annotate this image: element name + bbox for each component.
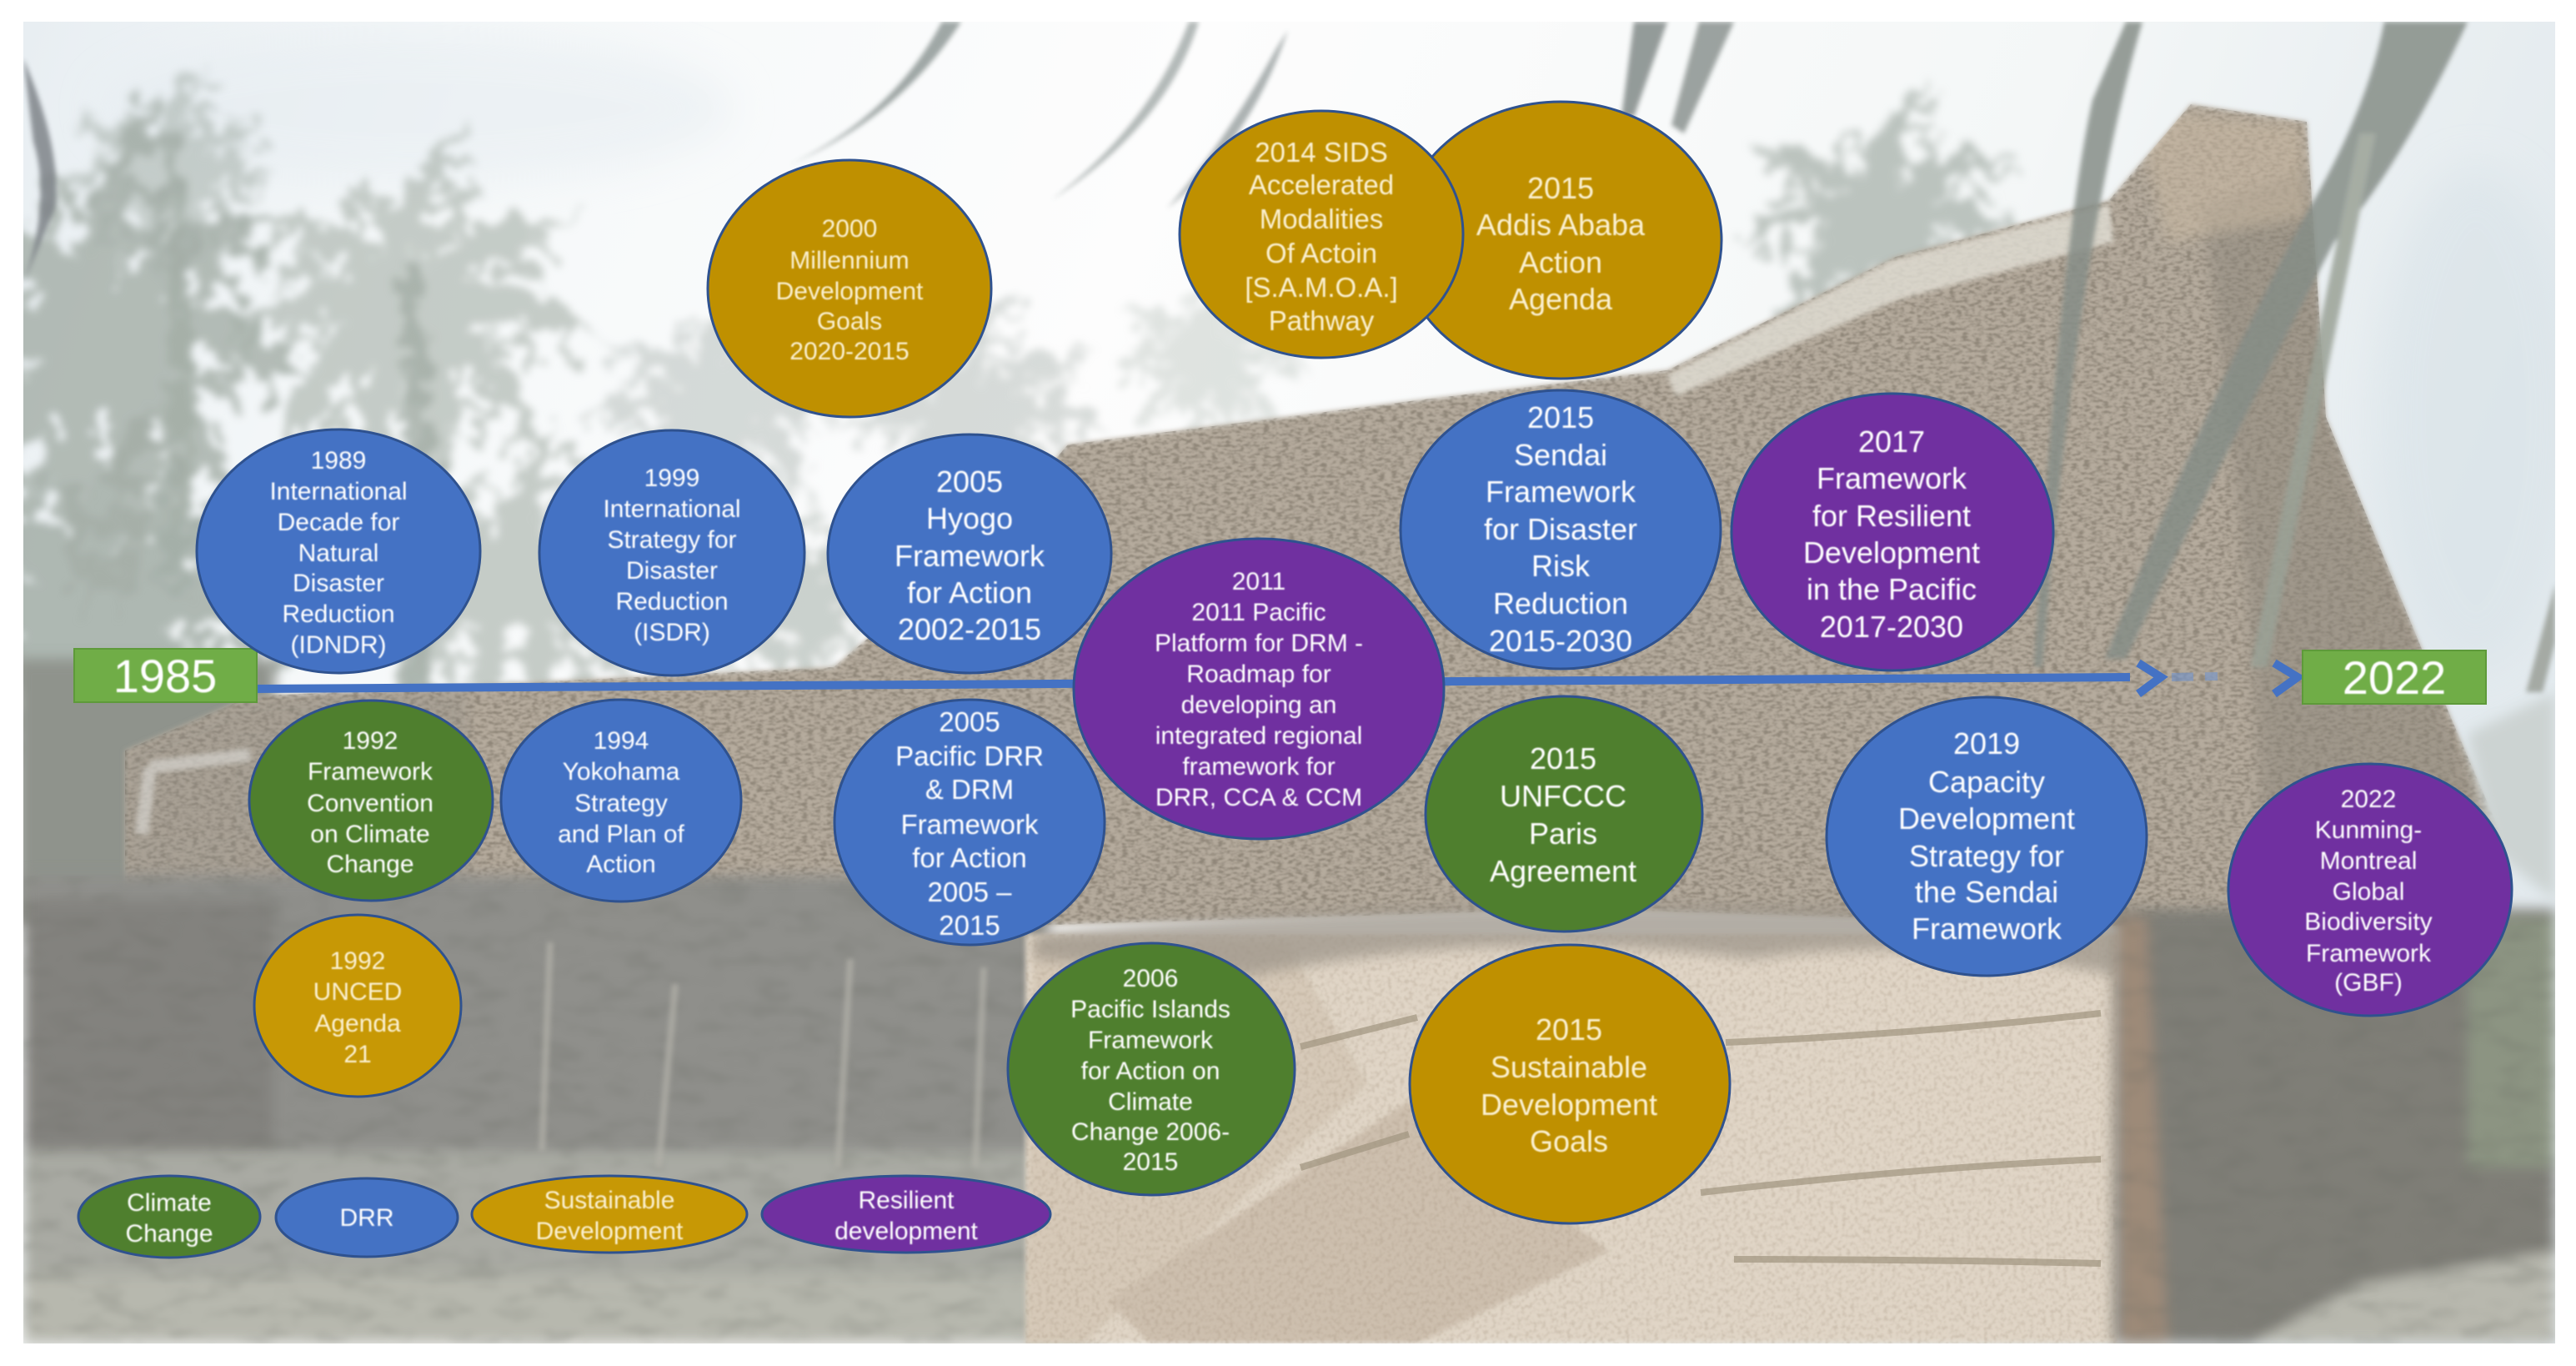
legend: sustainable development: Sustainable: [544, 1187, 674, 1214]
milestone: 2005 Hyogo Framework: 2005: [936, 465, 1003, 499]
milestone: 2015 Sendai Framework: Reduction: [1493, 586, 1628, 620]
milestone: 2005 Hyogo Framework: for Action: [907, 575, 1032, 610]
milestone: 2014 SIDS SAMOA Pathway: Accelerated: [1249, 169, 1394, 200]
legend: climate change: [78, 1176, 260, 1258]
dark right post and foliage: [2113, 692, 2555, 1343]
milestone: 2000 Millennium Development Goals: Goals: [817, 308, 882, 335]
milestone: 2005 Pacific DRR and DRM Framework: 2015: [939, 910, 1000, 941]
milestone: 2017 Framework for Resilient Development: Development: [1803, 535, 1980, 570]
milestone: 2005 Pacific DRR and DRM Framework: for Action: [912, 842, 1027, 873]
milestone: 2005 Pacific DRR and DRM Framework: 2005: [939, 706, 1000, 737]
milestone: 2022 Kunming-Montreal Global Biodiversity Framework: 2022: [2341, 786, 2396, 813]
milestone: 1999 ISDR: Strategy for: [607, 526, 737, 554]
milestone: 1992 UNCED Agenda 21: Agenda: [314, 1010, 401, 1037]
milestone: 2015 Addis Ababa Action Agenda: Agenda: [1509, 282, 1613, 316]
milestone: 2015 Sendai Framework: Risk: [1531, 549, 1591, 583]
legend: [78, 1176, 1050, 1258]
start year box: 1985: [113, 650, 217, 702]
legend: sustainable development: Development: [536, 1218, 684, 1245]
milestone: 2019 Capacity Development Strategy: [1827, 697, 2147, 976]
milestone: 2022 Kunming-Montreal Global Biodiversity Framework: Kunming-: [2315, 816, 2422, 844]
milestone: 2011 Pacific Platform for DRM: developing an: [1181, 691, 1336, 719]
legend: resilient development: development: [834, 1218, 979, 1245]
milestone: 2011 Pacific Platform for DRM: DRR, CCA & CCM: [1155, 784, 1362, 811]
milestone: 1989 IDNDR: Reduction: [282, 600, 395, 628]
milestone: 2019 Capacity Development Strategy: Strategy for: [1909, 839, 2064, 873]
milestone: 1989 IDNDR: [197, 429, 480, 673]
milestone: 2019 Capacity Development Strategy: 2019: [1953, 726, 2020, 761]
milestone: 2000 Millennium Development Goals: [708, 160, 991, 417]
milestone: 2014 SIDS SAMOA Pathway: [1180, 111, 1463, 358]
milestone: 1994 Yokohama Strategy: and Plan of: [558, 821, 685, 848]
milestone: 2011 Pacific Platform for DRM: 2011 Pacific: [1191, 599, 1326, 626]
milestone: 2006 Pacific Islands Framework for Action on Climate Change: 2006: [1123, 965, 1178, 992]
milestone: 2011 Pacific Platform for DRM: 2011: [1232, 568, 1285, 595]
milestone: 1999 ISDR: (ISDR): [634, 619, 710, 646]
milestone: 2019 Capacity Development Strategy: the Sendai: [1915, 875, 2058, 909]
hut shadow and dark underside: [23, 876, 1107, 1343]
milestone: 1992 UNCED Agenda 21: 21: [343, 1041, 372, 1068]
milestone: 1992 Framework Convention on Climate Change: 1992: [343, 727, 398, 755]
milestone: 2005 Hyogo Framework: 2002-2015: [898, 612, 1041, 646]
milestone: 1999 ISDR: 1999: [644, 465, 699, 492]
milestone: 2015 UNFCCC Paris Agreement: Agreement: [1490, 854, 1636, 888]
milestone: 2006 Pacific Islands Framework for Action on Climate Change: Climate: [1108, 1088, 1193, 1116]
legend: resilient development: [762, 1176, 1050, 1253]
milestone: 2006 Pacific Islands Framework for Action on Climate Change: Pacific Islands: [1070, 996, 1230, 1023]
milestone: 2014 SIDS SAMOA Pathway: [S.A.M.O.A.]: [1245, 272, 1398, 303]
milestone: 1992 Framework Convention on Climate Change: Convention: [307, 790, 434, 817]
milestone: 2005 Pacific DRR and DRM Framework: 2005 –: [928, 876, 1012, 907]
milestone: 1994 Yokohama Strategy: Yokohama: [563, 758, 680, 786]
milestone: 1992 UNCED Agenda 21: 1992: [330, 947, 385, 975]
milestone: 1989 IDNDR: International: [269, 478, 408, 505]
milestone: 2019 Capacity Development Strategy: Framework: [1912, 912, 2062, 946]
milestone: 1989 IDNDR: (IDNDR): [291, 631, 386, 659]
milestone: 2017 Framework for Resilient Development: for Resilient: [1812, 499, 1971, 533]
legend: climate change: Change: [125, 1220, 213, 1248]
milestone: 1999 ISDR: [539, 430, 804, 675]
legend: DRR: [276, 1178, 458, 1257]
milestone: 2015 Sendai Framework: for Disaster: [1484, 512, 1637, 546]
milestone: 2022 Kunming-Montreal Global Biodiversity Framework: Montreal: [2320, 847, 2417, 875]
milestone: 2015 UNFCCC Paris Agreement: Paris: [1529, 816, 1597, 851]
milestone: 2014 SIDS SAMOA Pathway: 2014 SIDS: [1255, 137, 1388, 168]
milestone: 2015 Sustainable Development Goals: Goals: [1530, 1124, 1608, 1158]
milestone: 2005 Hyogo Framework: Hyogo: [926, 501, 1013, 535]
milestone: 2015 Sendai Framework: Sendai: [1514, 438, 1607, 472]
milestone: 2015 Addis Ababa Action Agenda: [1400, 102, 1722, 379]
long palm fronds: [23, 22, 2555, 692]
milestone: 2005 Pacific DRR and DRM Framework: & DRM: [925, 774, 1014, 805]
milestone: 2022 Kunming-Montreal Global Biodiversity Framework: Global: [2333, 878, 2404, 906]
milestone: 2000 Millennium Development Goals: 2000: [822, 215, 877, 243]
milestone: 2006 Pacific Islands Framework for Action on Climate Change: Change 2006-: [1071, 1118, 1230, 1146]
milestone: 2015 Sustainable Development Goals: Sustainable: [1491, 1050, 1647, 1084]
milestone: 2015 UNFCCC Paris Agreement: 2015: [1530, 741, 1596, 776]
legend: DRR: DRR: [340, 1204, 393, 1232]
milestone: 2014 SIDS SAMOA Pathway: Pathway: [1269, 305, 1375, 336]
milestone: 1994 Yokohama Strategy: Action: [586, 851, 656, 878]
milestone: 2005 Hyogo Framework: [828, 434, 1111, 673]
milestone: 2017 Framework for Resilient Development: [1732, 394, 2053, 670]
milestone: 2014 SIDS SAMOA Pathway: Modalities: [1260, 203, 1383, 234]
end year box: [2303, 650, 2486, 704]
milestone: 2022 Kunming-Montreal Global Biodiversity Framework: (GBF): [2334, 969, 2403, 997]
milestone: 2014 SIDS SAMOA Pathway: Of Actoin: [1265, 238, 1377, 269]
milestone: 2022 Kunming-Montreal Global Biodiversity Framework: Framework: [2306, 940, 2432, 967]
milestone: 2015 Sendai Framework: 2015: [1527, 400, 1594, 434]
milestone: 1989 IDNDR: Natural: [298, 540, 378, 567]
milestone: 2017 Framework for Resilient Development: 2017-2030: [1820, 610, 1963, 644]
milestone: 2017 Framework for Resilient Development: 2017: [1858, 424, 1925, 459]
milestone: 2017 Framework for Resilient Development: Framework: [1817, 461, 1967, 495]
milestone: 2000 Millennium Development Goals: Millennium: [789, 247, 910, 274]
milestone: 2000 Millennium Development Goals: Development: [776, 278, 924, 305]
legend: climate change: Climate: [127, 1189, 212, 1217]
milestone: 2015 Sustainable Development Goals: Development: [1481, 1087, 1657, 1122]
milestone: 2011 Pacific Platform for DRM: Roadmap for: [1186, 660, 1331, 688]
milestone: 2015 Sustainable Development Goals: [1410, 945, 1730, 1223]
milestone: 2015 Sendai Framework: [1401, 390, 1721, 669]
milestone: 2011 Pacific Platform for DRM: integrated regional: [1155, 722, 1362, 750]
milestone: 1992 Framework Convention on Climate Change: on Climate: [310, 821, 430, 848]
milestone: 2005 Pacific DRR and DRM Framework: [834, 700, 1105, 945]
milestone: 2015 Addis Ababa Action Agenda: 2015: [1527, 171, 1594, 205]
woven wall panels: [1025, 934, 2117, 1343]
milestone: 2006 Pacific Islands Framework for Action on Climate Change: 2015: [1123, 1148, 1178, 1176]
milestone: 1999 ISDR: Disaster: [626, 557, 718, 585]
milestone: 2019 Capacity Development Strategy: Development: [1898, 801, 2075, 836]
milestone: 2006 Pacific Islands Framework for Action on Climate Change: for Action on: [1081, 1057, 1220, 1085]
milestone: 1992 UNCED Agenda 21: [254, 915, 461, 1097]
milestone: 2000 Millennium Development Goals: 2020-2015: [789, 338, 910, 365]
milestone: 2015 Addis Ababa Action Agenda: Action: [1519, 245, 1602, 279]
milestone: 2015 UNFCCC Paris Agreement: UNFCCC: [1500, 779, 1626, 813]
milestone: 2017 Framework for Resilient Development: in the Pacific: [1807, 572, 1977, 606]
milestone: 1992 Framework Convention on Climate Change: Change: [326, 851, 414, 878]
milestone: 2015 Addis Ababa Action Agenda: Addis Ababa: [1476, 208, 1646, 242]
timeline axis: [74, 649, 2486, 704]
milestone: 2011 Pacific Platform for DRM: Platform for DRM -: [1155, 630, 1363, 657]
milestone: 1989 IDNDR: 1989: [311, 447, 366, 475]
milestone: 2005 Hyogo Framework: Framework: [895, 539, 1045, 573]
milestone: 1992 UNCED Agenda 21: UNCED: [313, 978, 402, 1006]
milestone: 2006 Pacific Islands Framework for Action on Climate Change: Framework: [1088, 1027, 1214, 1054]
end year box: 2022: [2343, 651, 2446, 704]
milestone: 2015 Sendai Framework: Framework: [1486, 475, 1636, 509]
milestone: 2005 Pacific DRR and DRM Framework: Framework: [900, 809, 1039, 840]
milestone: 1989 IDNDR: Disaster: [293, 570, 384, 597]
milestone: 1992 Framework Convention on Climate Change: [249, 701, 493, 901]
milestone: 2011 Pacific Platform for DRM: framework for: [1182, 753, 1336, 781]
milestone: 1994 Yokohama Strategy: Strategy: [574, 790, 668, 817]
milestone: 2022 Kunming-Montreal Global Biodiversity Framework: Biodiversity: [2304, 908, 2433, 936]
timeline arrow line: [250, 663, 2298, 694]
legend: sustainable development: [472, 1176, 747, 1253]
milestone: 1999 ISDR: Reduction: [615, 588, 729, 615]
milestone: 1992 Framework Convention on Climate Change: Framework: [308, 758, 434, 786]
milestone: 1989 IDNDR: Decade for: [278, 509, 399, 536]
legend: resilient development: Resilient: [858, 1187, 955, 1214]
start year box: [74, 649, 257, 702]
milestone: 1999 ISDR: International: [603, 495, 741, 523]
milestone: 2006 Pacific Islands Framework for Action on Climate Change: [1008, 943, 1295, 1195]
milestone: 1994 Yokohama Strategy: [501, 700, 741, 901]
milestone: 2005 Pacific DRR and DRM Framework: Pacific DRR: [895, 741, 1044, 771]
milestone: 2015 UNFCCC Paris Agreement: [1426, 696, 1702, 932]
milestone: 2015 Sustainable Development Goals: 2015: [1536, 1012, 1602, 1047]
milestone: 2019 Capacity Development Strategy: Capacity: [1928, 765, 2045, 799]
milestone: 2015 Sendai Framework: 2015-2030: [1489, 624, 1632, 658]
milestone: 2011 Pacific Platform for DRM: [1074, 539, 1444, 839]
milestone: 2022 Kunming-Montreal Global Biodiversity Framework: [2228, 764, 2512, 1016]
milestone: 1994 Yokohama Strategy: 1994: [594, 727, 649, 755]
